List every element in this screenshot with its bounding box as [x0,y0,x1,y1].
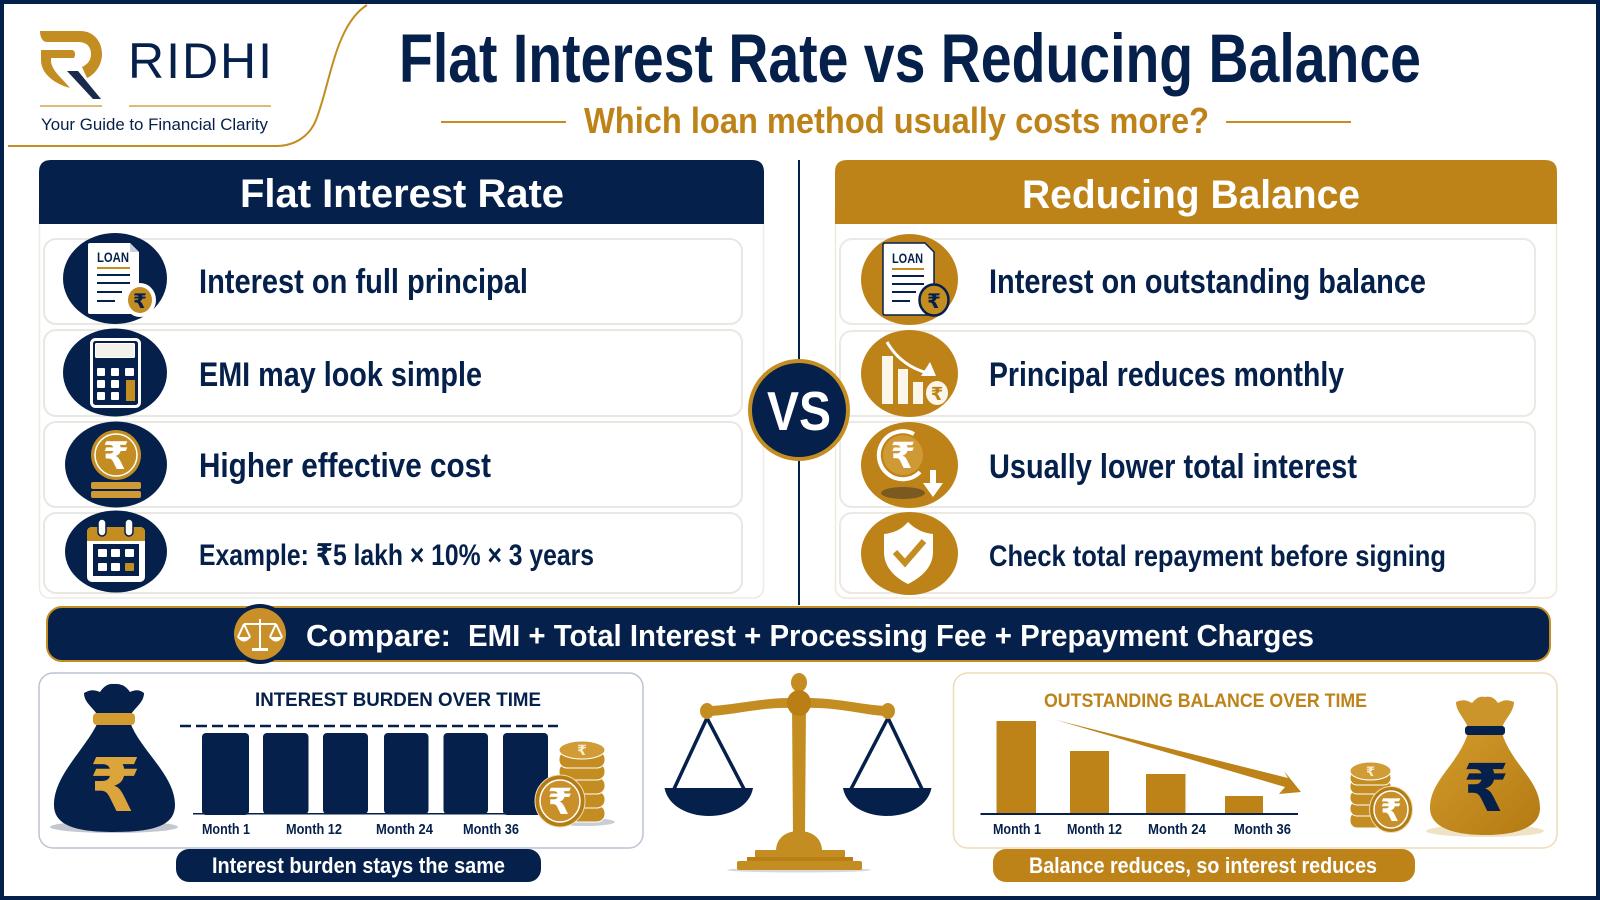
icon: gold money bag: ₹ [1463,751,1509,825]
text: principal reduces monthly: Principal reduces monthly [989,356,1344,394]
text: interest on outstanding balance: Interest on outstanding balance [989,263,1426,301]
row cards [840,239,1535,593]
chart labels [202,821,519,838]
tagline: Your Guide to Financial Clarity [41,115,268,134]
chart labels: Month 24 [376,821,434,838]
row cards [44,239,742,593]
text: emi may look simple: EMI may look simple [199,356,482,394]
panel: flat interest rate [39,160,764,598]
icon: gold money bag [1426,697,1544,837]
subtitle: Which loan method usually costs more? [584,100,1209,141]
illustration: balance scale [664,673,932,872]
center divider [798,160,800,605]
reducing header: Reducing Balance [1022,173,1360,217]
pans [664,788,932,816]
chart labels: Month 12 [286,821,342,838]
panel: outstanding balance chart [954,673,1557,848]
panel: reducing balance [835,160,1557,598]
icon: loan document [63,233,167,324]
text: check total repayment: Check total repayment before signing [989,540,1446,573]
icon: coin stack [1350,762,1412,832]
icon: loan document: ₹ [927,291,941,313]
icon: falling bars [861,330,958,417]
dashed line [180,725,558,727]
compare label: Compare: [306,618,451,653]
compare bar [47,604,1550,664]
icon: rupee with down arrow [861,422,958,508]
bar chart [980,721,1298,815]
logo name: RIDHI [128,33,272,89]
icon: coin stack [535,741,615,827]
pill: interest burden stays the same [176,849,541,882]
vs badge: VS [767,380,831,442]
chart labels [993,821,1291,838]
chart labels: Month 1 [993,821,1041,838]
icon: balance [230,604,290,664]
base [776,831,822,851]
chart heading: OUTSTANDING BALANCE OVER TIME [1044,691,1367,712]
logo rules [40,105,271,107]
icon: rupee coin [65,422,167,508]
text: higher effective cost: Higher effective cost [199,447,491,485]
text: usually lower total interest: Usually lower total interest [989,448,1357,486]
icon: loan document: LOAN [892,250,923,266]
logo mark [40,31,102,99]
icon: loan document [861,234,958,325]
reducing header [835,160,1557,224]
icon: coin stack: ₹ [547,781,573,822]
icon: coin stack: ₹ [1366,764,1375,779]
pill: balance reduces: Balance reduces, so interest reduces [1029,853,1377,878]
icon: rupee with down arrow: ₹ [890,435,916,476]
panel: interest burden chart [39,673,643,848]
logo block [8,5,367,146]
icon: shield [861,512,958,595]
text: interest on full principal: Interest on full principal [199,263,528,301]
logo curve [8,5,367,146]
chart heading: INTEREST BURDEN OVER TIME [255,690,541,711]
chart labels: Month 12 [1067,821,1122,838]
chart labels: Month 36 [463,821,519,838]
icon: rupee coin: ₹ [103,436,129,478]
compare items: EMI + Total Interest + Processing Fee + Prepayment Charges [468,618,1314,653]
pill: interest burden stays the same: Interest burden stays the same [212,853,505,878]
flat header [39,160,764,224]
icon: falling bars: ₹ [931,384,943,404]
text: example: Example: ₹5 lakh × 10% × 3 years [199,539,594,572]
icon: coin stack: ₹ [1380,793,1402,828]
pill: balance reduces [993,849,1415,882]
icon: calculator [63,328,167,416]
icon: calendar [65,510,167,592]
chart labels: Month 1 [202,821,250,838]
chart labels: Month 24 [1148,821,1207,838]
flat header: Flat Interest Rate [240,172,564,216]
post and beam [792,705,806,835]
icon: navy money bag: ₹ [89,744,141,827]
ropes [674,718,922,789]
trend arrow [1056,720,1301,794]
icon: loan document: LOAN [97,249,129,265]
chart labels: Month 36 [1234,821,1291,838]
icon: navy money bag [50,684,178,833]
vs badge [750,361,848,459]
icon: loan document: ₹ [133,291,147,313]
bar chart [193,733,550,815]
icon: coin stack: ₹ [577,742,587,758]
